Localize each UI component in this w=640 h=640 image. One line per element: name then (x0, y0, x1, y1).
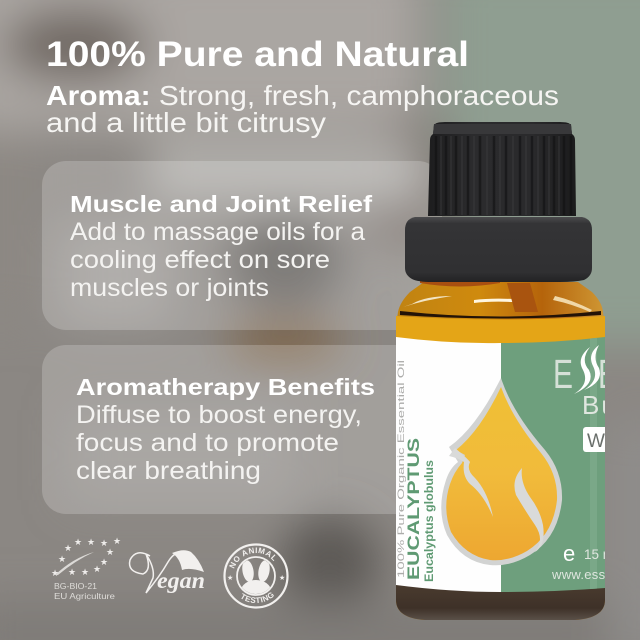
heading: aromatherapy benefits: Aromatherapy Benefits (76, 374, 375, 400)
logo: no animal testing: ★ (227, 574, 233, 582)
stars: ★ (87, 537, 95, 547)
logo: vegan (130, 550, 205, 593)
title: 100% Pure and Natural (46, 35, 469, 74)
text: diffuse: Diffuse to boost energy, (76, 401, 362, 429)
text: massage oils (70, 218, 365, 302)
label vertical text (396, 360, 436, 582)
logo: EU organic: EU Agriculture (54, 591, 115, 601)
stars: ★ (64, 543, 72, 553)
leaf (172, 550, 204, 572)
stars: ★ (68, 567, 76, 577)
stars: ★ (93, 564, 101, 574)
stars (51, 536, 121, 578)
label vertical text: 100% Pure Organic Essential Oil (396, 360, 407, 578)
aroma text: and a little bit citrusy (46, 107, 326, 138)
bottle cap (405, 122, 592, 282)
panel: muscle and joint relief (42, 161, 442, 330)
text: massage oils: Add to massage oils for a (70, 218, 365, 246)
heading: muscle and joint relief: Muscle and Joint Relief (70, 191, 372, 217)
base glass (396, 580, 605, 620)
brand text: E (553, 351, 573, 397)
logo: vegan: egan (157, 568, 205, 593)
logo: no animal testing: ★ (279, 574, 285, 582)
text: diffuse: focus and to promote (76, 429, 339, 457)
logo: no animal testing (223, 543, 289, 609)
brand text: e (563, 541, 575, 566)
brand text: Bu (582, 390, 618, 420)
logo: EU organic: BG-BIO-21 (54, 581, 97, 591)
cap ridges (436, 136, 571, 215)
stars: ★ (58, 554, 66, 564)
text: massage oils: muscles or joints (70, 274, 269, 302)
rabbit (242, 560, 270, 594)
logo: no animal testing: TESTING (241, 592, 274, 603)
logo: no animal testing: NO ANIMAL (229, 548, 276, 568)
text: massage oils: cooling effect on sore (70, 246, 330, 274)
text: diffuse: clear breathing (76, 457, 261, 485)
logo: EU organic (51, 536, 121, 601)
label vertical text: EUCALYPTUS (405, 438, 423, 580)
brand text: 15 ml (584, 547, 617, 562)
stars: ★ (74, 537, 82, 547)
icon: oil drop (441, 378, 562, 565)
label vertical text: Eucalyptus globulus (424, 460, 436, 582)
stars: ★ (81, 567, 89, 577)
aroma text: Aroma: Strong, fresh, camphoraceous (46, 80, 559, 111)
collar (405, 217, 592, 282)
brand text: Wo (587, 431, 615, 452)
panel: aromatherapy benefits (42, 345, 442, 514)
aroma text (46, 80, 559, 138)
stars: ★ (100, 557, 108, 567)
bottle glass (396, 278, 605, 620)
product bottle (396, 122, 628, 620)
drop swirl left (449, 448, 493, 517)
text: diffuse (76, 401, 362, 485)
brand text: E (598, 351, 618, 397)
stars: ★ (100, 538, 108, 548)
brand text: www.essenti (551, 567, 628, 582)
stars: ★ (51, 568, 59, 578)
brand text (552, 345, 605, 579)
dark shoulder line (400, 311, 601, 318)
drop swirl right (514, 468, 544, 552)
stars: ★ (113, 536, 121, 546)
stars: ★ (106, 547, 114, 557)
bottle label (396, 337, 605, 592)
